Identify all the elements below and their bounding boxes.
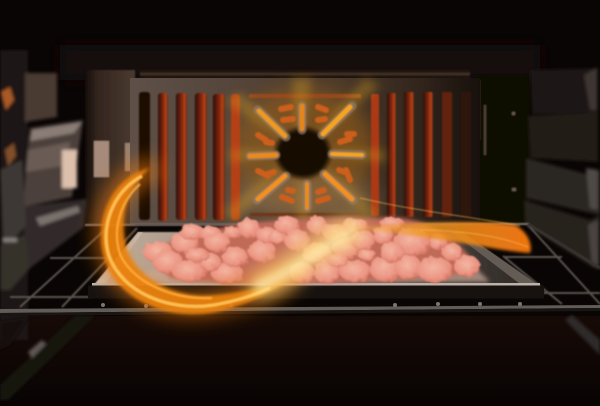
baking tray (88, 217, 544, 298)
hot air swirl (101, 168, 531, 314)
right wall embossed panels (524, 68, 600, 355)
warm glow around fan (231, 88, 375, 212)
swirl highlights (106, 176, 270, 306)
swirl outer glow (107, 171, 285, 305)
right vent slots (371, 92, 471, 217)
left vent slots (139, 92, 240, 221)
tater tots on tray (143, 216, 480, 284)
left side pillar (85, 70, 135, 225)
glow across food (262, 230, 350, 285)
fan long blade slots (250, 106, 362, 208)
lower left rack support (0, 316, 95, 400)
shadow under the food (150, 217, 478, 284)
swirl tail on right (345, 222, 531, 253)
right side pillar (476, 75, 530, 225)
ceiling trim (140, 70, 470, 78)
fan small slot pairs (258, 107, 354, 201)
front rack bar (0, 302, 600, 316)
swirl main band (101, 168, 290, 314)
fan dark centre (276, 128, 330, 178)
swirl second highlight (117, 184, 212, 298)
oven rack back and side wires (10, 224, 600, 307)
left wall embossed panels (0, 50, 87, 340)
fan cover frame (249, 94, 362, 216)
steam haze behind fan (230, 176, 380, 220)
pale band under the food (135, 262, 490, 282)
back wall (130, 78, 480, 224)
light beams radiating from fan (222, 78, 385, 228)
tail streaks (360, 198, 528, 247)
bright core across food (258, 232, 352, 286)
